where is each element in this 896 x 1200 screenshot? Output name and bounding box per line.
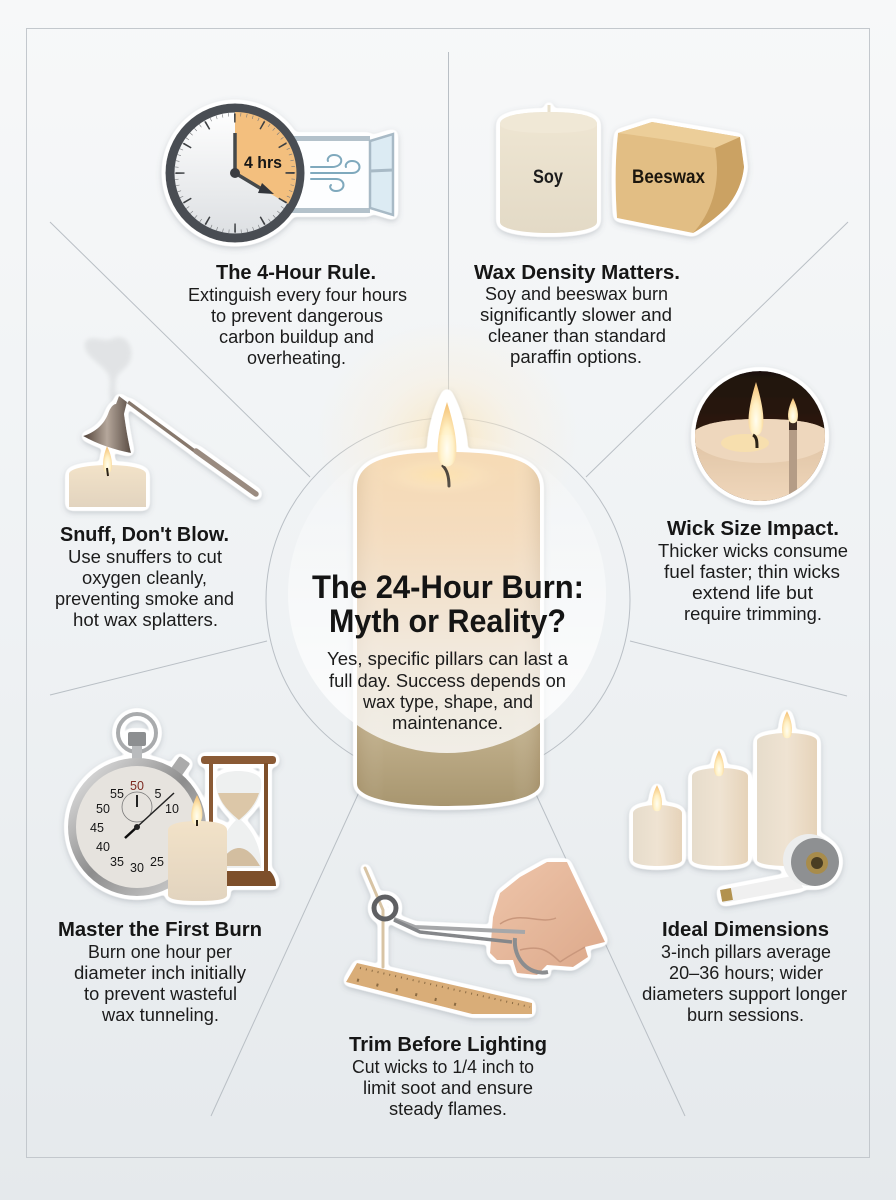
icon: clock and open window	[170, 108, 393, 238]
candle side shading	[357, 452, 540, 806]
stopwatch numbers: 35	[110, 855, 124, 869]
text: the 4-hour rule: carbon buildup and	[219, 327, 374, 347]
text: wick size impact: Thicker wicks consume	[658, 541, 848, 561]
main title: The 24-Hour Burn:	[312, 569, 584, 605]
text: wick size impact: fuel faster; thin wicks	[664, 562, 840, 582]
text: wick size impact: require trimming.	[684, 604, 822, 624]
window frame	[290, 134, 393, 215]
text: master the first burn: diameter inch initially	[74, 963, 246, 983]
trimmer	[374, 897, 548, 973]
icon: candle wick and match	[690, 371, 832, 510]
text: snuff, don't blow: hot wax splatters.	[73, 610, 218, 630]
stopwatch numbers: 10	[165, 802, 179, 816]
stopwatch numbers: 5	[155, 787, 162, 801]
text: the 4-hour rule: Extinguish every four hours	[188, 285, 407, 305]
match stick	[789, 430, 797, 494]
stopwatch ring and crown	[118, 714, 190, 777]
text: snuff, don't blow: Use snuffers to cut	[68, 547, 222, 567]
hand	[490, 862, 605, 975]
minute ticks	[176, 114, 294, 232]
text: the 4-hour rule	[188, 262, 407, 368]
stopwatch sub-dial and hands	[122, 792, 174, 838]
candle wick	[443, 466, 449, 486]
text: trim before lighting	[349, 1034, 547, 1119]
text: snuff, don't blow: Snuff, Don't Blow.	[60, 524, 229, 546]
text: the 4-hour rule: overheating.	[247, 348, 346, 368]
icon: soy candle and beeswax block	[500, 105, 744, 233]
summary text: wax type, shape, and	[362, 691, 533, 712]
candle top pool	[378, 455, 502, 495]
text: the 4-hour rule: The 4-Hour Rule.	[216, 262, 376, 284]
stopwatch body	[72, 762, 202, 892]
stopwatch numbers: 50	[130, 779, 144, 793]
central candle illustration	[357, 396, 540, 806]
wick	[365, 868, 383, 967]
soy candle	[500, 105, 597, 233]
candle body	[357, 452, 540, 806]
text: snuff, don't blow: oxygen cleanly,	[82, 568, 207, 588]
wax surface	[695, 419, 825, 501]
stopwatch numbers: 45	[90, 821, 104, 835]
text: trim before lighting: steady flames.	[389, 1099, 507, 1119]
hour ticks	[180, 118, 290, 228]
text: wick size impact: Wick Size Impact.	[667, 518, 839, 540]
summary text: full day. Success depends on	[329, 670, 566, 691]
summary text	[327, 648, 569, 733]
tall pillar	[757, 711, 817, 866]
stopwatch numbers: 50	[96, 802, 110, 816]
snuffer handle	[128, 402, 196, 452]
icon: candle snuffer	[69, 396, 256, 507]
translucent centre circle	[288, 435, 606, 753]
central title and summary	[312, 569, 584, 733]
stopwatch numbers	[90, 779, 179, 875]
text: master the first burn: Master the First Burn	[58, 919, 262, 941]
text: trim before lighting: Trim Before Lighting	[349, 1034, 547, 1056]
text: ideal dimensions: 3-inch pillars average	[661, 942, 831, 962]
text: wax density matters: cleaner than standard	[488, 326, 666, 346]
stopwatch numbers: 55	[110, 787, 124, 801]
tape roll	[783, 834, 839, 886]
tape strip	[720, 875, 803, 903]
match flame	[788, 398, 798, 423]
text: trim before lighting: Cut wicks to 1/4 inch to	[352, 1057, 534, 1077]
ruler	[346, 963, 532, 1014]
text: master the first burn: to prevent wasteful	[84, 984, 237, 1004]
clock face	[170, 108, 300, 238]
candle flame	[438, 402, 456, 466]
small flame	[103, 446, 112, 473]
icon: wick trimmer, hand and ruler	[346, 862, 605, 1014]
text: master the first burn: wax tunneling.	[101, 1005, 219, 1025]
text: the 4-hour rule: to prevent dangerous	[211, 306, 383, 326]
icon: three pillar candles and tape measure	[633, 711, 839, 903]
four hour sector	[235, 112, 296, 204]
soy label: Soy	[533, 167, 563, 188]
text: wick size impact: extend life but	[692, 583, 813, 603]
icon: rising smoke	[85, 337, 132, 402]
fingers	[500, 918, 585, 962]
stopwatch numbers: 30	[130, 861, 144, 875]
text: ideal dimensions: Ideal Dimensions	[662, 919, 829, 941]
stopwatch numbers: 25	[150, 855, 164, 869]
main title	[312, 569, 584, 639]
beeswax label: Beeswax	[632, 167, 705, 188]
small pillar	[633, 785, 682, 866]
text: ideal dimensions: diameters support longer	[642, 984, 847, 1004]
medium pillar	[692, 750, 748, 866]
clock label: 4 hrs	[244, 153, 282, 172]
clock hands	[235, 133, 265, 191]
small candle	[69, 465, 146, 507]
main title: Myth or Reality?	[329, 603, 566, 639]
text: ideal dimensions: 20–36 hours; wider	[669, 963, 823, 983]
summary text: Yes, specific pillars can last a	[327, 648, 569, 669]
text: ideal dimensions: burn sessions.	[687, 1005, 804, 1025]
text: wax density matters: Wax Density Matters.	[474, 262, 680, 284]
text: wax density matters	[474, 262, 680, 367]
text: trim before lighting: limit soot and ensure	[363, 1078, 533, 1098]
flame halo	[433, 396, 462, 462]
beeswax block	[616, 122, 744, 233]
wick flame	[749, 382, 763, 435]
text: snuff, don't blow: preventing smoke and	[55, 589, 234, 609]
text: wax density matters: paraffin options.	[510, 347, 642, 367]
summary text: maintenance.	[392, 712, 503, 733]
snuffer bell	[83, 396, 131, 453]
text: wax density matters: Soy and beeswax burn	[485, 284, 668, 304]
wind lines	[311, 155, 360, 191]
text: wax density matters: significantly slower and	[480, 305, 672, 325]
text: ideal dimensions	[642, 919, 847, 1025]
text: master the first burn: Burn one hour per	[88, 942, 232, 962]
text: wick size impact	[658, 518, 848, 624]
small flame	[191, 795, 202, 825]
icon: stopwatch, hourglass and candle	[72, 714, 276, 901]
text: master the first burn	[58, 919, 262, 1025]
small candle	[168, 821, 227, 901]
text: snuff, don't blow	[55, 524, 234, 630]
stopwatch numbers: 40	[96, 840, 110, 854]
hourglass	[201, 756, 276, 886]
